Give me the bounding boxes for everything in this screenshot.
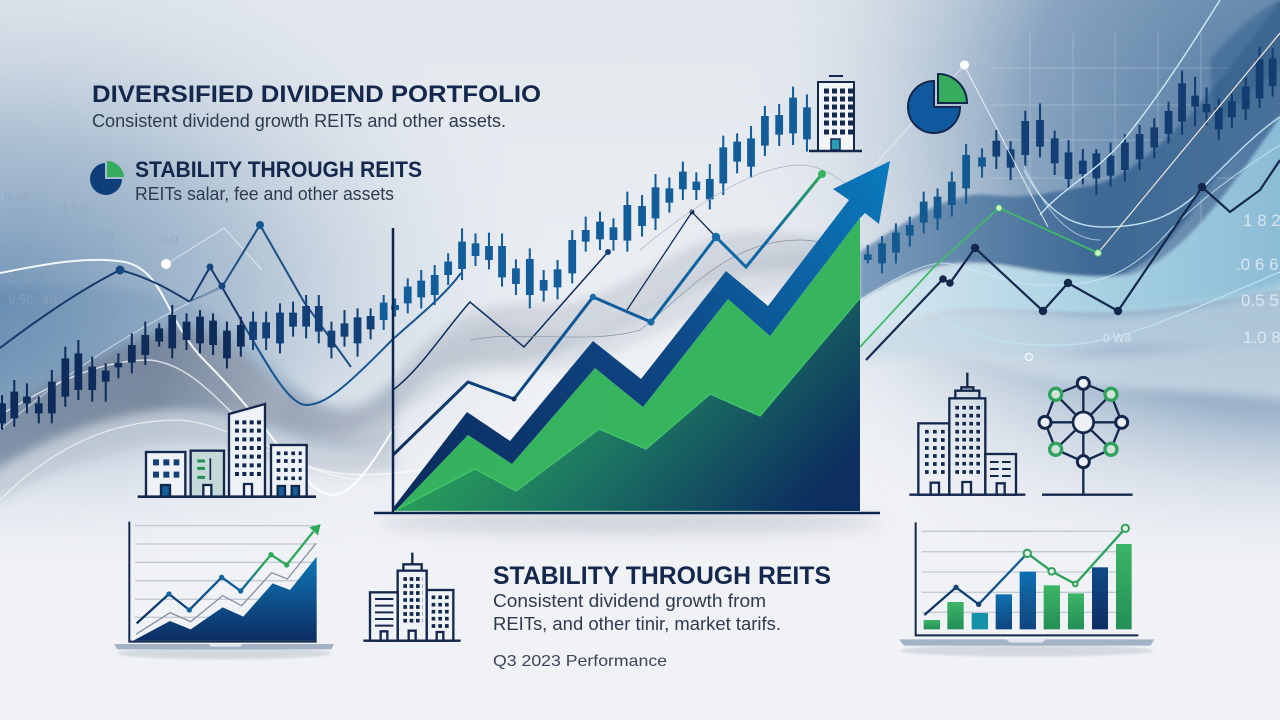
subtitle: Consistent dividend growth REITs and other assets. xyxy=(92,111,506,131)
section text bottom: REITs, and other tinir, market tarifs. xyxy=(493,614,781,634)
faint numbers left: 4.5.0 xyxy=(60,200,89,215)
rising line series xyxy=(393,174,822,455)
faint numbers left: 0.00 xyxy=(50,256,75,271)
faint numbers left: 0.04 0 xyxy=(46,272,82,287)
section text bottom xyxy=(493,591,781,634)
section heading top: STABILITY THROUGH REITS xyxy=(135,157,422,182)
section text top: REITs salar, fee and other assets xyxy=(135,184,394,204)
smooth curves left xyxy=(0,228,420,500)
section heading bottom: STABILITY THROUGH REITS xyxy=(493,562,831,590)
faint numbers right: 0 W8 xyxy=(1103,331,1131,345)
axes xyxy=(374,228,880,513)
faint numbers right: 1 8 2 xyxy=(1243,211,1280,230)
background grid top right xyxy=(990,33,1240,240)
faint numbers right xyxy=(1103,211,1280,347)
office building icon top xyxy=(809,76,862,151)
green area lower xyxy=(396,298,860,511)
city buildings icon center xyxy=(363,553,461,641)
chart shadow xyxy=(380,510,880,534)
candlestick chart: left and center xyxy=(2,192,627,430)
section text bottom: Consistent dividend growth from xyxy=(493,591,766,611)
green area upper xyxy=(395,218,860,511)
laptop area chart left xyxy=(114,522,334,659)
faint numbers right: 0.5 5 xyxy=(1241,291,1279,310)
waves: right pale lower bands xyxy=(860,275,1280,405)
waves: left grey and blue xyxy=(0,232,860,525)
icon: small pie chart xyxy=(90,161,124,195)
faint numbers left: 0.61 xyxy=(8,206,33,221)
waves: right blue bands xyxy=(860,0,1280,345)
rising band and arrow xyxy=(393,161,890,511)
faint numbers right: .0 6 6 xyxy=(1236,255,1279,274)
line series right xyxy=(860,0,1280,360)
faint numbers left: 0.8 xyxy=(96,228,114,243)
city buildings icon right xyxy=(909,373,1025,495)
network wheel icon xyxy=(1039,377,1133,495)
thin center lines xyxy=(393,165,870,390)
city buildings icon left xyxy=(138,404,316,497)
light green ridge xyxy=(396,298,860,510)
main area chart xyxy=(374,161,890,513)
candlestick chart: center upper and right xyxy=(642,47,1273,273)
laptop bar chart right xyxy=(899,522,1154,657)
faint numbers left: 0.0 xyxy=(160,232,178,247)
faint numbers left: 0.96 xyxy=(4,190,29,205)
faint numbers left: 0.08 xyxy=(8,256,33,271)
faint numbers left xyxy=(4,190,178,307)
faint numbers left: 0.0 xyxy=(96,244,114,259)
period label: Q3 2023 Performance xyxy=(493,653,667,670)
pie chart icon large xyxy=(908,74,967,133)
faint numbers left: 40.0 xyxy=(42,292,67,307)
faint numbers left: 0.00.0 xyxy=(120,292,156,307)
faint numbers left: 9.56 xyxy=(8,292,33,307)
faint numbers right: 1.0 8 xyxy=(1243,328,1280,347)
faint numbers left: 0.09 xyxy=(8,272,33,287)
line series left xyxy=(0,221,461,430)
title: DIVERSIFIED DIVIDEND PORTFOLIO xyxy=(92,81,541,108)
